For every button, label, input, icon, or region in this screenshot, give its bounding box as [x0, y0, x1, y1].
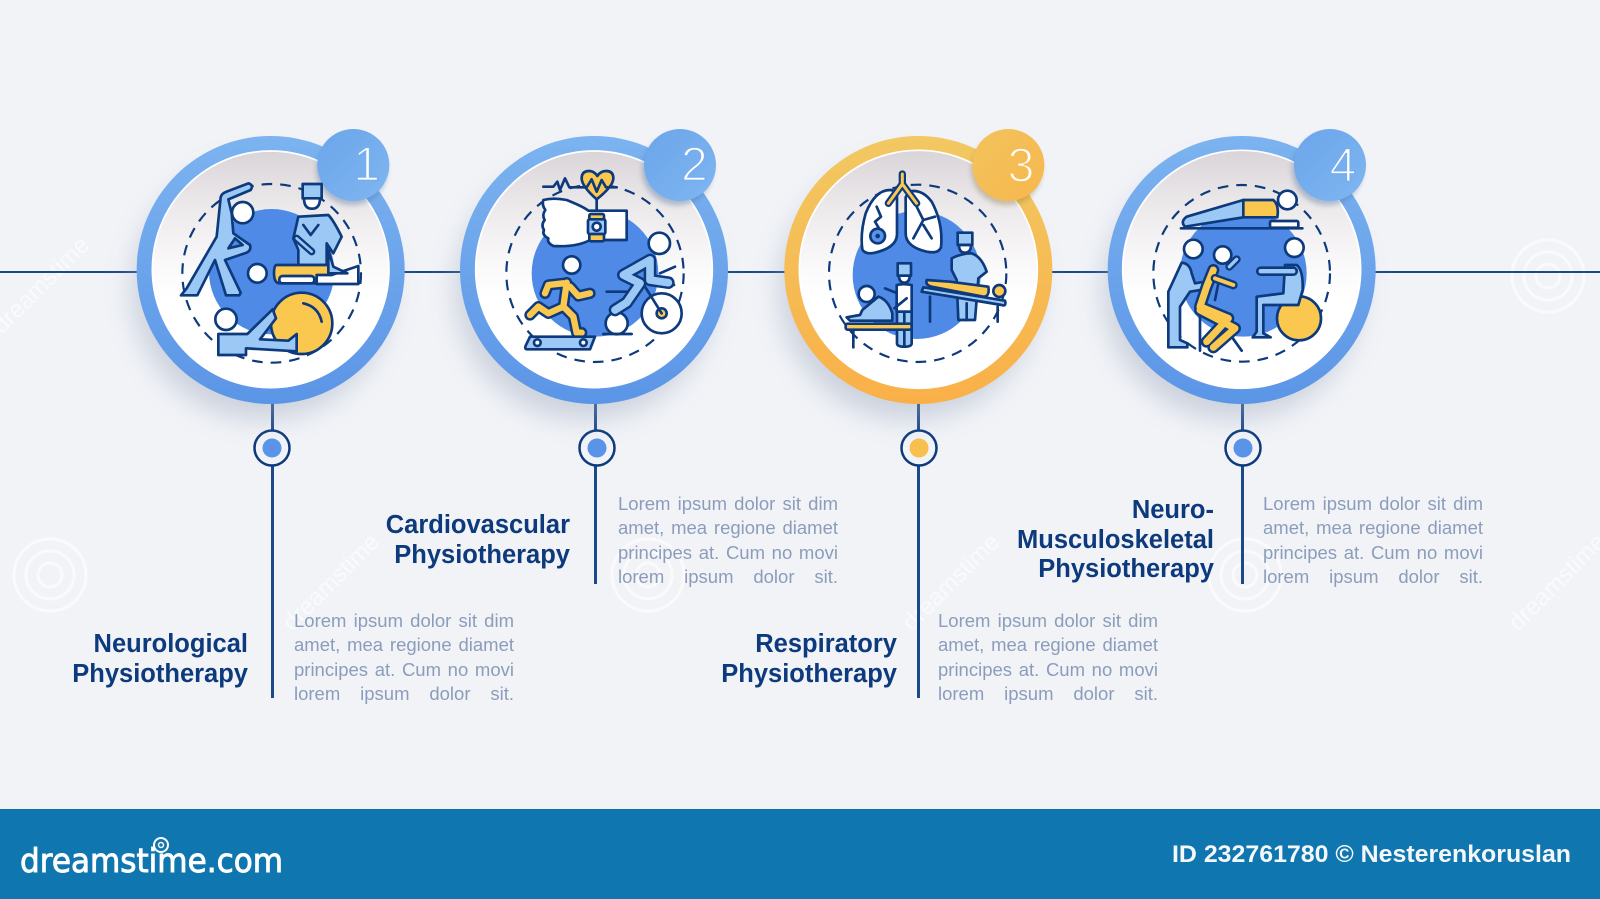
lower therapist and patient bed — [897, 284, 912, 312]
text block 3 — [938, 610, 1158, 704]
icon: circle 3 with lungs and patients: 3 — [1008, 139, 1034, 192]
heading 4 — [1017, 496, 1214, 583]
seated massage client — [1200, 283, 1242, 351]
icon: circle 1 with exercising patients: 1 — [353, 139, 380, 192]
text block 4: Lorem ipsum dolor sit dim — [1263, 493, 1483, 514]
bed and legs — [274, 265, 330, 283]
heading 2 — [386, 511, 570, 568]
stretching figure — [181, 183, 252, 295]
therapist — [293, 215, 342, 265]
text block 2: lorem ipsum dolor sit. — [618, 566, 838, 587]
text block 4 — [1263, 493, 1483, 587]
icon: circle 2 with heart monitor and cardio exercise: 2 — [681, 139, 708, 192]
marker 1 — [253, 429, 291, 467]
heading 1 — [72, 630, 248, 688]
text block 4: principes at. Cum no movi — [1263, 542, 1483, 563]
heading 4: Musculoskeletal — [1017, 526, 1214, 554]
icon: circle 1 with exercising patients — [121, 129, 405, 432]
upper therapist and tilted table — [952, 253, 987, 320]
panel: step 4 neuro-musculoskeletal physiotherapy — [1017, 404, 1483, 587]
text block 1 — [294, 610, 514, 704]
footer band — [0, 809, 1600, 899]
text block 4: amet, mea regione diamet — [1263, 517, 1483, 538]
heading 2: Cardiovascular — [386, 511, 570, 539]
watermark swirls and diagonal marks: dreamstime — [897, 528, 1005, 636]
text block 3: amet, mea regione diamet — [938, 634, 1158, 655]
hand with watch — [542, 199, 627, 246]
text block 2: Lorem ipsum dolor sit dim — [618, 493, 838, 514]
text block 3: lorem ipsum dolor sit. — [938, 683, 1158, 704]
icon: circle 2 with heart monitor and cardio exercise — [444, 129, 728, 432]
vertical connector 1 — [271, 400, 274, 698]
marker 2 — [578, 429, 616, 467]
icon: circle 3 with lungs and patients — [768, 129, 1052, 432]
ball exercise — [271, 293, 332, 354]
heading 4: Physiotherapy — [1038, 555, 1214, 583]
logo: dreamstime: dreamstime.com — [20, 841, 283, 880]
panel: step 1 neurological physiotherapy — [72, 404, 514, 704]
marker 3 — [900, 429, 938, 467]
text block 1: principes at. Cum no movi — [294, 659, 514, 680]
text block 4: lorem ipsum dolor sit. — [1263, 566, 1483, 587]
heading 3 — [721, 630, 897, 688]
vertical connector 4 — [1241, 400, 1244, 584]
heart monitor — [582, 171, 613, 199]
heading 1: Physiotherapy — [72, 660, 248, 688]
heading 3: Respiratory — [755, 630, 897, 658]
heading 4: Neuro- — [1132, 496, 1214, 524]
vertical connector 2 — [594, 400, 597, 584]
cyclist — [642, 293, 682, 333]
text block 2: principes at. Cum no movi — [618, 542, 838, 563]
prone patient on table — [1183, 200, 1243, 227]
text block 3: Lorem ipsum dolor sit dim — [938, 610, 1158, 631]
watermark swirls and diagonal marks: dreamstime — [277, 528, 385, 636]
text block 1: Lorem ipsum dolor sit dim — [294, 610, 514, 631]
icon: circle 4 with massage and ball therapy — [1092, 129, 1376, 432]
text block 2: amet, mea regione diamet — [618, 517, 838, 538]
text block 3: principes at. Cum no movi — [938, 659, 1158, 680]
heading 3: Physiotherapy — [721, 660, 897, 688]
text block 1: amet, mea regione diamet — [294, 634, 514, 655]
vertical connector 3 — [917, 400, 920, 698]
marker 4 — [1224, 429, 1262, 467]
standing therapist — [1168, 263, 1211, 347]
image id and author credit: ID 232761780 © Nesterenkoruslan — [1172, 841, 1571, 868]
runner — [530, 283, 590, 333]
seated patient on ball — [1277, 296, 1321, 340]
text block 1: lorem ipsum dolor sit. — [294, 683, 514, 704]
lungs — [862, 190, 897, 253]
heading 1: Neurological — [94, 630, 248, 658]
timeline horizontal line — [0, 271, 1600, 273]
panel: step 3 respiratory physiotherapy — [721, 404, 1158, 704]
panel: step 2 cardiovascular physiotherapy — [386, 404, 838, 587]
heading 2: Physiotherapy — [394, 540, 570, 568]
text block 2 — [618, 493, 838, 587]
icon: circle 4 with massage and ball therapy: 4 — [1330, 139, 1356, 192]
